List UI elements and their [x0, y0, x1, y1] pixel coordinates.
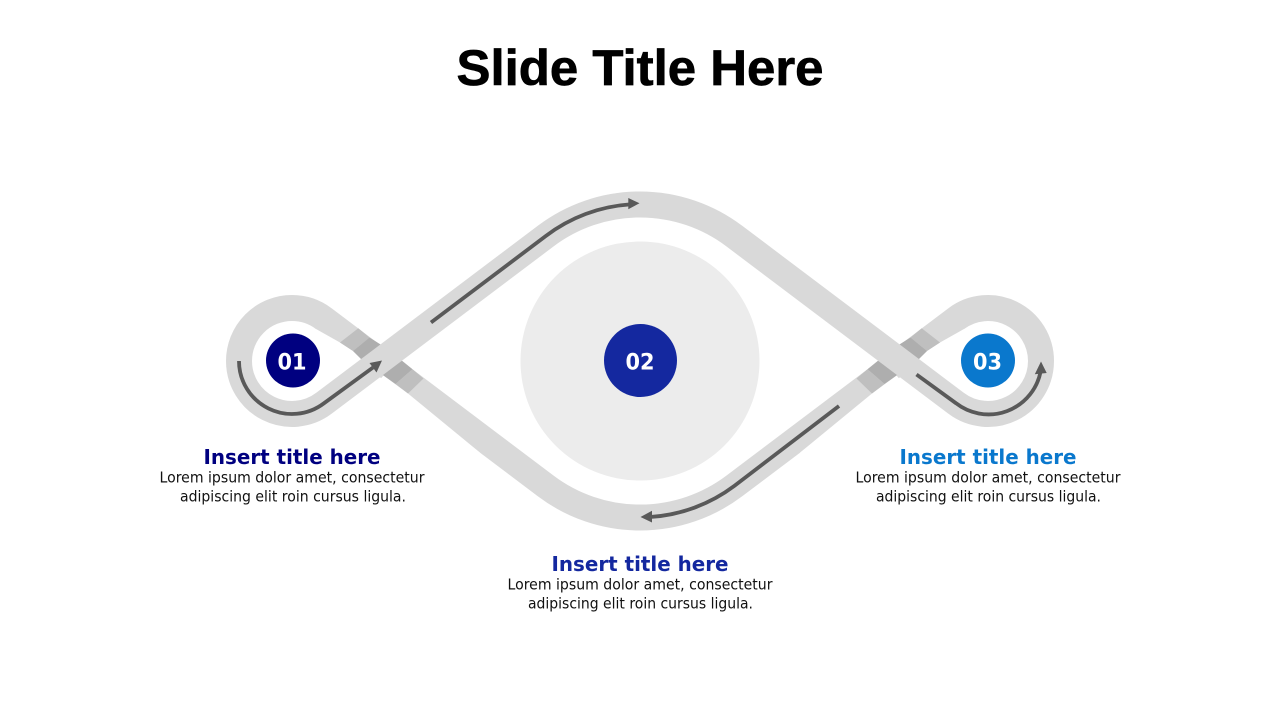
crossing shadow: right — [800, 328, 980, 460]
text block 02: Lorem ipsum dolor amet, consectetur — [508, 576, 773, 594]
badge 02 — [604, 324, 677, 397]
arrow: around right loop — [916, 362, 1047, 414]
text block 01: adipiscing elit roin cursus ligula. — [180, 488, 406, 506]
title: Slide Title Here — [456, 40, 824, 96]
badge 03 — [961, 334, 1015, 388]
text block 03: Lorem ipsum dolor amet, consectetur — [856, 468, 1121, 486]
crossing shadow: left — [300, 328, 480, 460]
over band of infinity track — [239, 204, 1041, 414]
badge 02: 02 — [626, 350, 654, 376]
text block 01 — [160, 445, 425, 506]
badge 01 — [266, 334, 320, 388]
badge 01: 01 — [278, 350, 306, 376]
text block 03: adipiscing elit roin cursus ligula. — [876, 488, 1101, 506]
arrow: under bottom arc — [640, 406, 839, 522]
text block 03 — [856, 445, 1121, 506]
text block 01: Lorem ipsum dolor amet, consectetur — [160, 468, 425, 486]
under band of infinity track — [292, 308, 1041, 518]
text block 02 — [508, 552, 773, 612]
arrow: over top arc — [431, 198, 640, 322]
text block 01: Insert title here — [204, 445, 380, 469]
arrow: around left loop — [239, 360, 382, 414]
text block 02: Insert title here — [552, 552, 728, 576]
center disc — [520, 242, 760, 480]
text block 02: adipiscing elit roin cursus ligula. — [528, 594, 753, 612]
badge 03: 03 — [973, 350, 1002, 376]
text block 03: Insert title here — [900, 445, 1076, 469]
